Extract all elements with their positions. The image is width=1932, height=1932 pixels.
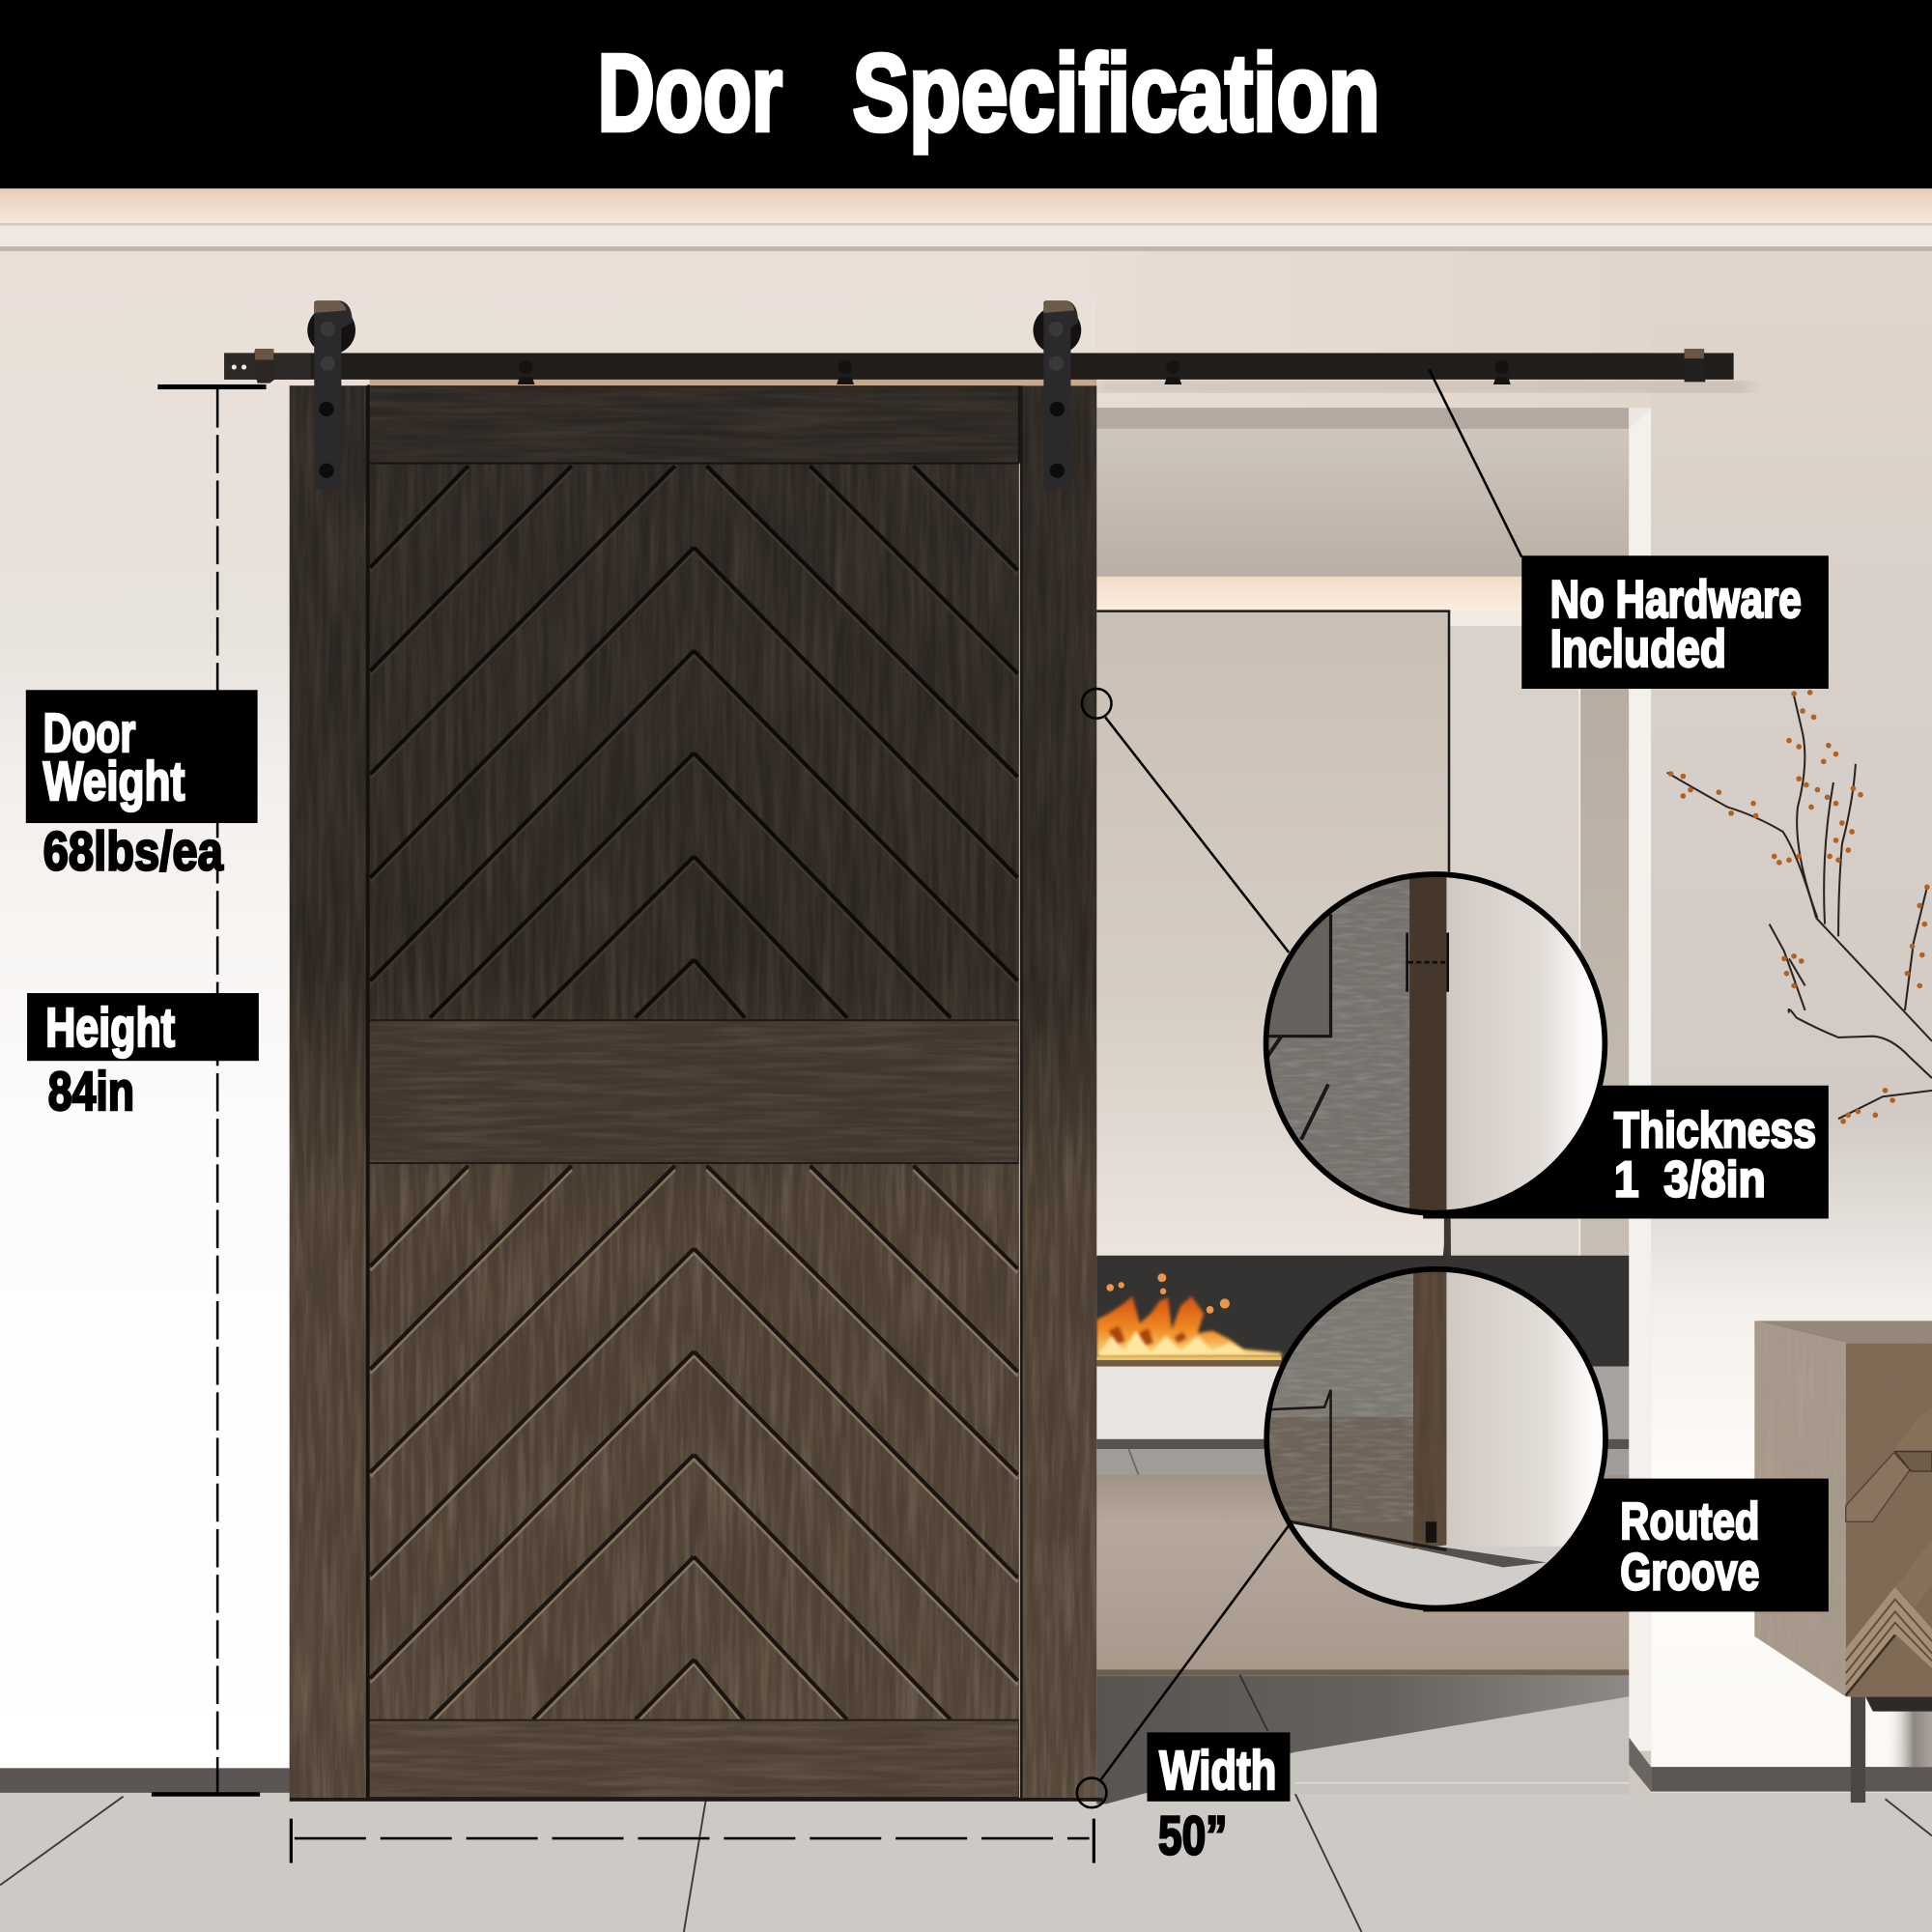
header bar with title: Specification (853, 32, 1380, 155)
magnifier: door thickness close-up (1266, 874, 1606, 1213)
door: dark-to-brown barn door with herringbone panels (290, 385, 1103, 1802)
cabinet (1754, 1321, 1932, 1803)
wall shadow of track (1096, 382, 1749, 392)
door bottom rail (368, 1720, 1019, 1798)
fireplace (1096, 1256, 1629, 1439)
label panel: Routed Groove: Groove (1620, 1544, 1759, 1601)
label panel: Door Weight (26, 690, 258, 823)
leader marker: thickness point (1082, 689, 1289, 952)
leader marker: groove point (1077, 1525, 1289, 1807)
value: door weight: 68lbs/ea (43, 821, 224, 882)
door top rail (368, 385, 1019, 464)
label panel: No Hardware Included (1521, 555, 1829, 689)
header bar with title (0, 0, 1932, 188)
door middle rail (368, 1020, 1019, 1163)
label panel: Thickness (1423, 1086, 1829, 1218)
height dimension line (152, 384, 267, 1797)
leader line: hardware (1430, 370, 1521, 557)
cabinet leg (1851, 1696, 1865, 1803)
label panel: Routed Groove: Routed (1620, 1493, 1759, 1550)
label panel: No Hardware Included: No Hardware (1550, 569, 1802, 629)
label panel: Thickness: Thickness (1614, 1102, 1816, 1158)
track end stops (252, 349, 1705, 384)
value: height: 84in (48, 1061, 134, 1122)
label panel: Door Weight: Door (43, 702, 135, 763)
track bolts (518, 360, 1511, 384)
label panel: Routed Groove (1423, 1479, 1829, 1611)
right door hanger (1034, 300, 1081, 489)
label panel: No Hardware Included: Included (1550, 618, 1726, 678)
value: width: 50” (1158, 1805, 1227, 1866)
door lower herringbone grooves (370, 1166, 1018, 1724)
door upper herringbone grooves (370, 466, 1018, 1022)
label panel: Door Weight: Weight (43, 751, 185, 811)
left door hanger (307, 300, 355, 489)
width dimension line (290, 1819, 1095, 1863)
label panel: Width: Width (1159, 1740, 1276, 1801)
label panel: Height (27, 993, 259, 1061)
magnifier: routed groove close-up (1266, 1269, 1613, 1609)
room seen through the door opening (1096, 408, 1651, 1804)
header bar with title: Door (598, 32, 782, 155)
label panel: Height: Height (45, 997, 175, 1058)
label panel: Thickness: 1 3/8in (1614, 1152, 1766, 1208)
decorative branch with berries (1667, 690, 1932, 1124)
sliding barn door track (224, 349, 1734, 385)
